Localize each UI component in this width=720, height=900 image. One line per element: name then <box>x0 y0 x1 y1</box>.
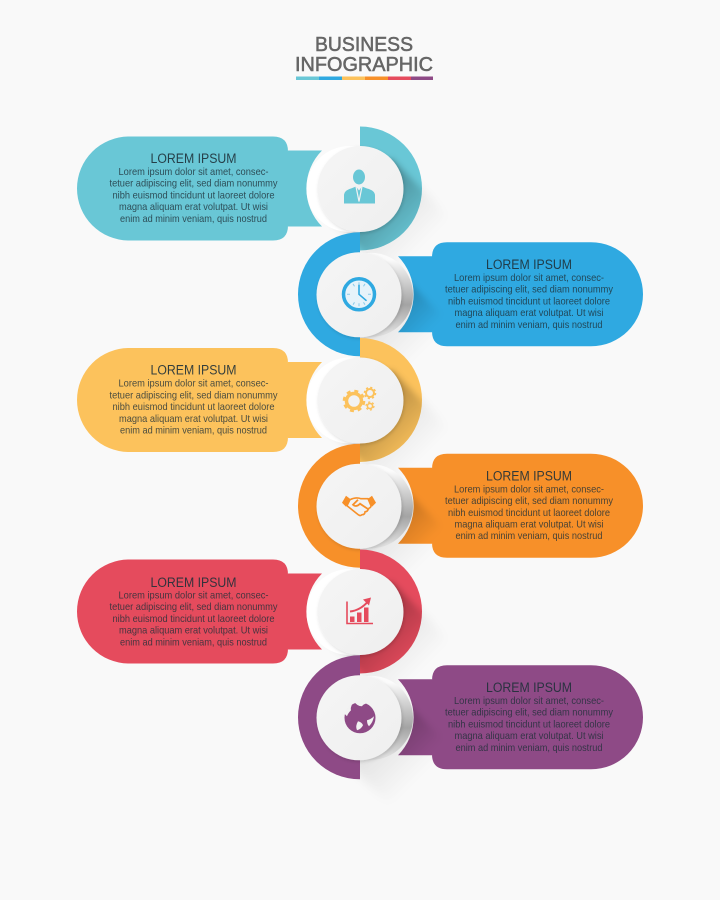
text: step 2: magna aliquam erat volutpat. Ut wisi <box>454 308 604 319</box>
yellow half ring <box>360 338 422 462</box>
text: step 1: tetuer adipiscing elit, sed diam nonummy <box>110 179 278 190</box>
text: step 1: enim ad minim veniam, quis nostrud <box>120 214 267 225</box>
step 4: handshake, orange <box>298 444 643 568</box>
icon: globe <box>344 701 376 733</box>
text: step 5: LOREM IPSUM <box>150 575 236 590</box>
title <box>295 34 433 76</box>
step 6: globe, purple <box>298 655 643 780</box>
text: step 2: LOREM IPSUM <box>486 257 572 272</box>
text: step 4: magna aliquam erat volutpat. Ut wisi <box>454 520 604 531</box>
long shadow on connector <box>398 492 434 544</box>
white crescent <box>306 146 392 232</box>
disc <box>318 146 404 232</box>
long shadow on connector <box>398 707 430 755</box>
text: step 3: Lorem ipsum dolor sit amet, consec- <box>118 379 268 390</box>
text: step 4: nibh euismod tincidunt ut laoreet dolore <box>448 508 610 519</box>
text: step 5: nibh euismod tincidunt ut laoreet dolore <box>112 614 275 625</box>
yellow label pill <box>77 348 322 452</box>
text: step 6: magna aliquam erat volutpat. Ut wisi <box>454 731 604 742</box>
text: step 2: Lorem ipsum dolor sit amet, consec- <box>454 273 604 284</box>
disc <box>318 358 404 444</box>
text: step 6: Lorem ipsum dolor sit amet, consec- <box>454 696 604 707</box>
blue label pill <box>398 242 643 346</box>
white crescent <box>306 569 392 655</box>
step 5: chart, red <box>77 550 422 674</box>
long shadow on ring <box>360 368 422 462</box>
text: step 3 <box>110 363 278 436</box>
text: step 3: enim ad minim veniam, quis nostrud <box>120 426 267 436</box>
icon: businessman <box>344 170 375 204</box>
step 2: clock, blue <box>298 232 643 356</box>
orange label pill <box>398 454 643 558</box>
long shadow on ring <box>360 580 422 674</box>
soft background shadows <box>331 158 451 807</box>
text: step 1: LOREM IPSUM <box>150 151 236 166</box>
text: step 3: tetuer adipiscing elit, sed diam nonummy <box>110 390 278 401</box>
text: step 4: Lorem ipsum dolor sit amet, consec- <box>454 484 604 495</box>
title colour bar <box>296 76 433 80</box>
red half ring <box>360 550 422 674</box>
disc <box>316 675 402 760</box>
text: step 5: Lorem ipsum dolor sit amet, consec- <box>118 590 268 602</box>
icon: clock <box>344 279 374 310</box>
text: step 2 <box>445 257 614 331</box>
text: step 1: Lorem ipsum dolor sit amet, consec- <box>118 167 268 178</box>
text: step 4: enim ad minim veniam, quis nostrud <box>456 531 603 542</box>
grey crescent <box>329 464 413 548</box>
text: step 6: enim ad minim veniam, quis nostrud <box>456 743 603 754</box>
text: step 3: nibh euismod tincidunt ut laoreet dolore <box>112 402 275 413</box>
text: step 5: tetuer adipiscing elit, sed diam nonummy <box>110 602 278 613</box>
grey crescent <box>329 253 413 337</box>
text: step 6 <box>445 680 614 754</box>
text: step 2: tetuer adipiscing elit, sed diam nonummy <box>445 285 614 296</box>
text: step 3: magna aliquam erat volutpat. Ut wisi <box>119 414 268 425</box>
text: step 6: LOREM IPSUM <box>486 680 572 695</box>
text: step 6: nibh euismod tincidunt ut laoreet dolore <box>448 719 610 730</box>
purple half ring <box>298 655 360 779</box>
text: step 6: tetuer adipiscing elit, sed diam nonummy <box>445 708 614 719</box>
text: step 2: enim ad minim veniam, quis nostrud <box>456 320 603 331</box>
purple label pill <box>398 665 643 769</box>
text: step 4: tetuer adipiscing elit, sed diam nonummy <box>445 496 614 507</box>
text: step 4 <box>445 468 614 542</box>
red label pill <box>77 560 322 664</box>
grey crescent <box>329 676 413 760</box>
disc <box>316 252 402 337</box>
step 3: gears, yellow <box>77 338 422 462</box>
icon: gears <box>344 388 376 411</box>
orange half ring <box>298 444 360 568</box>
text: step 2: nibh euismod tincidunt ut laoreet dolore <box>448 296 610 307</box>
icon: handshake <box>342 496 376 516</box>
disc <box>318 569 404 655</box>
title: INFOGRAPHIC <box>295 54 433 76</box>
cyan label pill <box>77 136 322 240</box>
title: BUSINESS <box>315 34 413 56</box>
text: step 5: enim ad minim veniam, quis nostrud <box>120 637 267 648</box>
step 1: person, cyan <box>77 126 422 250</box>
long shadow on connector <box>398 281 434 332</box>
text: step 1: nibh euismod tincidunt ut laoreet dolore <box>112 190 275 201</box>
text: step 5 <box>110 575 278 648</box>
text: step 1 <box>110 151 278 225</box>
text: step 1: magna aliquam erat volutpat. Ut wisi <box>119 202 268 213</box>
icon: rising bar chart <box>347 598 373 624</box>
long shadow on ring <box>360 157 422 250</box>
disc <box>316 464 402 549</box>
text: step 5: magna aliquam erat volutpat. Ut wisi <box>119 626 268 637</box>
blue half ring <box>298 232 360 356</box>
white crescent <box>306 358 392 444</box>
text: step 3: LOREM IPSUM <box>150 363 236 378</box>
cyan half ring <box>360 126 422 250</box>
text: step 4: LOREM IPSUM <box>486 468 572 483</box>
